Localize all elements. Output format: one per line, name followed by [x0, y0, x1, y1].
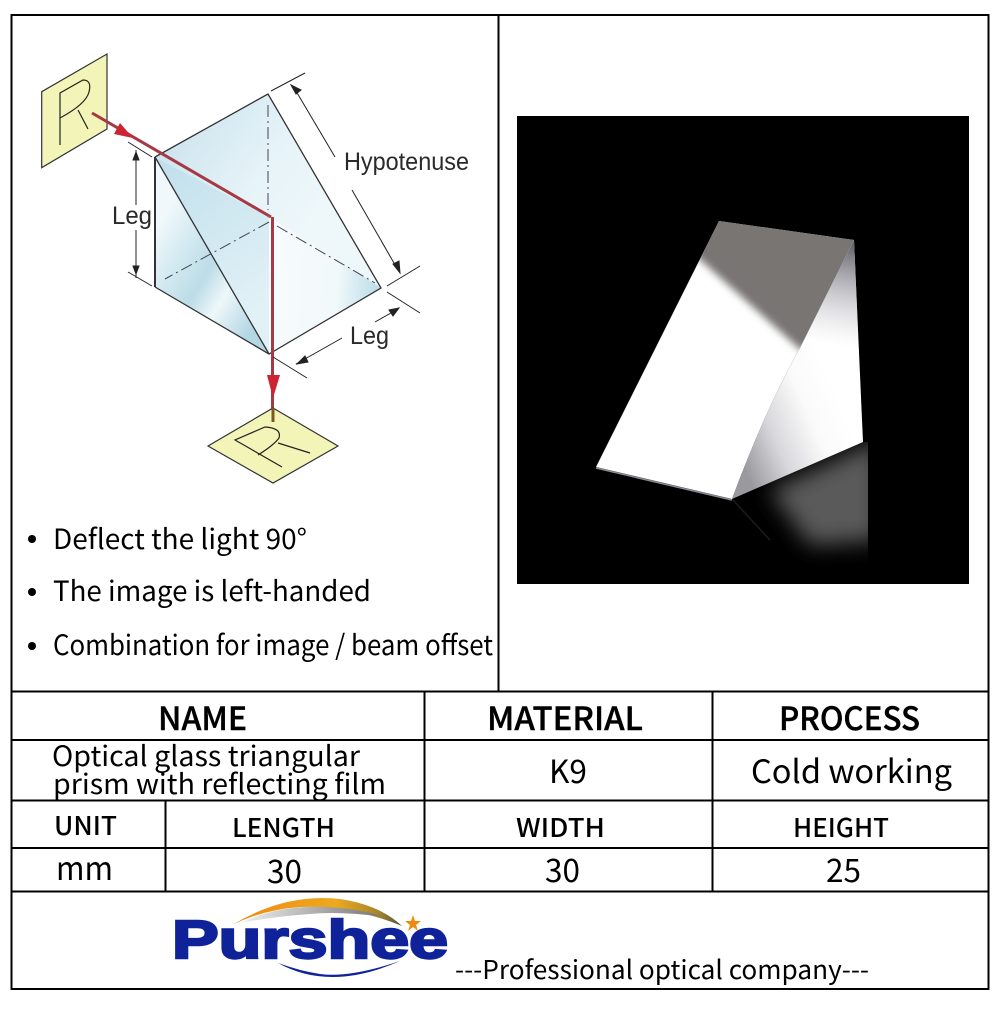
dimension values — [56, 844, 861, 893]
dimension: left leg: Leg — [112, 202, 152, 230]
tagline: ---Professional optical company--- — [455, 950, 869, 987]
table values row: prism with reflecting film — [53, 763, 386, 803]
output plate with letter R — [208, 408, 338, 483]
table headers: name, material, process — [158, 694, 920, 740]
dimension headers: UNIT — [54, 806, 117, 843]
reflection under prism — [732, 440, 880, 545]
prism diagram — [42, 54, 469, 483]
dimension: left leg — [112, 142, 152, 286]
dimension headers: LENGTH — [232, 808, 335, 845]
dimension: hypotenuse — [271, 73, 469, 286]
dimension headers: WIDTH — [516, 808, 605, 845]
source plate with letter R — [42, 54, 107, 168]
dimension values: mm — [56, 844, 113, 890]
dimension values: 30 — [267, 847, 302, 893]
table headers: name, material, process: NAME — [158, 694, 247, 740]
red light path with arrows — [92, 113, 280, 422]
dimension: bottom leg — [273, 292, 420, 378]
table headers: name, material, process: PROCESS — [779, 694, 920, 740]
glass prism body — [155, 94, 381, 354]
bullet list — [28, 518, 493, 664]
bullet list: Combination for image / beam offset — [53, 624, 493, 664]
dimension values: 30 — [545, 846, 580, 892]
bullet list: The image is left-handed — [53, 570, 371, 610]
product photo of prism — [517, 116, 969, 584]
dimension: hypotenuse: Hypotenuse — [344, 148, 469, 176]
dimension: bottom leg: Leg — [350, 322, 389, 350]
dimension headers — [54, 806, 889, 845]
dimension headers: HEIGHT — [793, 808, 889, 845]
table values row — [52, 735, 952, 803]
bullet list: Deflect the light 90° — [53, 518, 307, 558]
table values row: Optical glass triangular — [52, 735, 360, 775]
table headers: name, material, process: MATERIAL — [487, 694, 643, 740]
dimension values: 25 — [826, 846, 861, 892]
logo: Purshee — [172, 898, 448, 977]
logo: Purshee: Purshee — [172, 910, 448, 970]
side face — [732, 240, 863, 499]
hypotenuse face — [596, 221, 854, 499]
table values row: K9 — [549, 747, 587, 793]
table values row: Cold working — [751, 747, 952, 793]
